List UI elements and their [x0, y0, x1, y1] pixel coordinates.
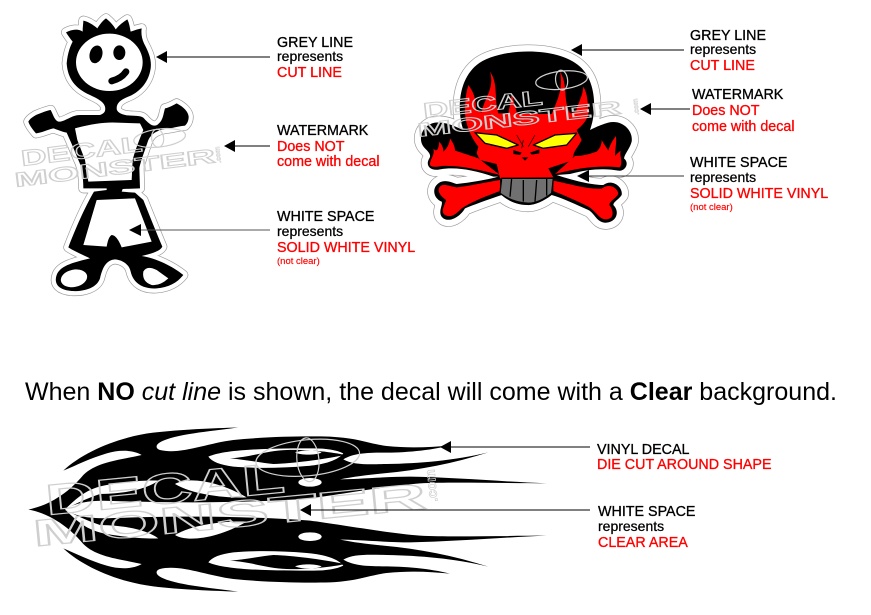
arrow: white space: [129, 224, 270, 236]
heading: clear background note: When NO cut line is shown, the decal will come with a Clear background.: [25, 378, 837, 406]
watermark: .com: [214, 146, 223, 163]
icon: tribal flame: [28, 427, 547, 592]
label: white space: CLEAR AREA: [598, 535, 688, 551]
label: grey line: CUT LINE: [277, 65, 342, 81]
label: vinyl decal: [597, 442, 772, 473]
arrow: watermark: [640, 103, 690, 115]
label: grey line: GREY LINE: [277, 35, 353, 51]
label: watermark: [277, 123, 380, 170]
arrow: white space: [300, 504, 590, 516]
icon: stick figure with cut line: [28, 18, 189, 291]
arrow: vinyl decal: [440, 441, 590, 453]
label: white space: WHITE SPACE: [277, 209, 374, 225]
watermark: MONSTER: [31, 476, 428, 554]
arrow: white space: [577, 170, 684, 182]
flame lower half: [28, 509, 547, 592]
label: white space: [598, 504, 695, 551]
watermark: [412, 62, 641, 142]
label: watermark: WATERMARK: [692, 87, 784, 103]
label: white space: SOLID WHITE VINYL: [690, 186, 828, 202]
watermark: MONSTER: [13, 145, 218, 192]
panel: skull decal: [412, 28, 828, 223]
watermark: DECAL: [20, 131, 144, 171]
label: white space: represents: [277, 223, 343, 239]
label: grey line: CUT LINE: [690, 58, 755, 74]
watermark: DECAL: [422, 87, 544, 123]
label: watermark: come with decal: [277, 154, 380, 170]
label: watermark: Does NOT: [692, 103, 760, 119]
label: grey line: represents: [690, 41, 756, 57]
label: grey line: [277, 35, 353, 81]
label: white space: represents: [598, 518, 664, 534]
watermark: MONSTER: [416, 98, 623, 142]
label: white space: WHITE SPACE: [598, 504, 695, 520]
label: watermark: come with decal: [692, 119, 795, 135]
label: watermark: WATERMARK: [277, 123, 369, 139]
watermark: .com: [421, 469, 440, 503]
label: white space: (not clear): [277, 256, 320, 267]
panel: stick figure decal: [11, 18, 415, 291]
label: white space: WHITE SPACE: [690, 155, 787, 171]
flame upper half: [28, 427, 547, 509]
label: grey line: represents: [277, 48, 343, 64]
arrow: watermark: [224, 140, 270, 152]
watermark: .com: [632, 98, 641, 115]
label: white space: (not clear): [690, 202, 733, 213]
label: white space: represents: [690, 169, 756, 185]
label: grey line: [690, 28, 766, 74]
icon: flaming skull and crossbones: [421, 51, 632, 223]
label: watermark: Does NOT: [277, 139, 345, 155]
label: grey line: GREY LINE: [690, 28, 766, 44]
label: watermark: [692, 87, 795, 135]
label: vinyl decal: VINYL DECAL: [597, 442, 689, 458]
label: white space: [277, 209, 415, 267]
label: vinyl decal: DIE CUT AROUND SHAPE: [597, 457, 772, 473]
panel: tribal flame decal: [26, 426, 772, 592]
arrow: grey line: [156, 51, 270, 63]
label: white space: SOLID WHITE VINYL: [277, 240, 415, 256]
label: white space: [690, 155, 828, 213]
watermark: [11, 122, 224, 192]
arrow: grey line: [571, 44, 684, 56]
watermark: [26, 426, 442, 554]
watermark: DECAL: [43, 454, 287, 525]
